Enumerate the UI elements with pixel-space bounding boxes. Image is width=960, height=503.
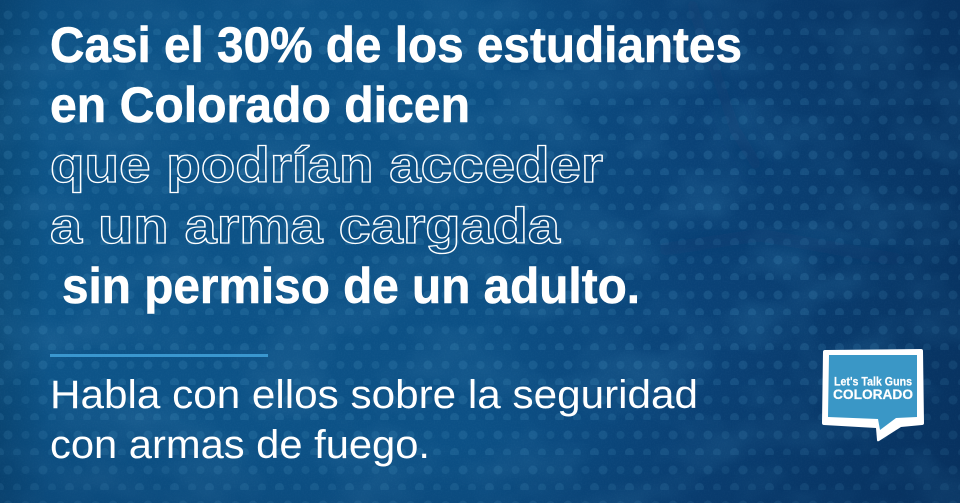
logo text: Let's Talk Guns <box>834 376 912 388</box>
title: bold statement start: en Colorado dicen <box>50 77 470 133</box>
title: outlined statement middle: que podrían acceder <box>50 137 603 193</box>
divider <box>50 354 268 357</box>
logo text <box>833 376 913 402</box>
title: bold statement start: Casi el 30% de los estudiantes <box>50 17 742 73</box>
title: bold statement end: sin permiso de un adulto. <box>62 258 640 314</box>
logo: speech bubble <box>822 349 924 441</box>
title: outlined statement middle <box>50 137 603 254</box>
logo text: COLORADO <box>833 387 913 402</box>
title: bold statement start <box>50 17 742 133</box>
call to action text: con armas de fuego. <box>50 423 430 467</box>
call to action text: Habla con ellos sobre la seguridad <box>50 373 698 417</box>
title: outlined statement middle: a un arma cargada <box>50 198 561 254</box>
call to action text <box>50 373 698 467</box>
